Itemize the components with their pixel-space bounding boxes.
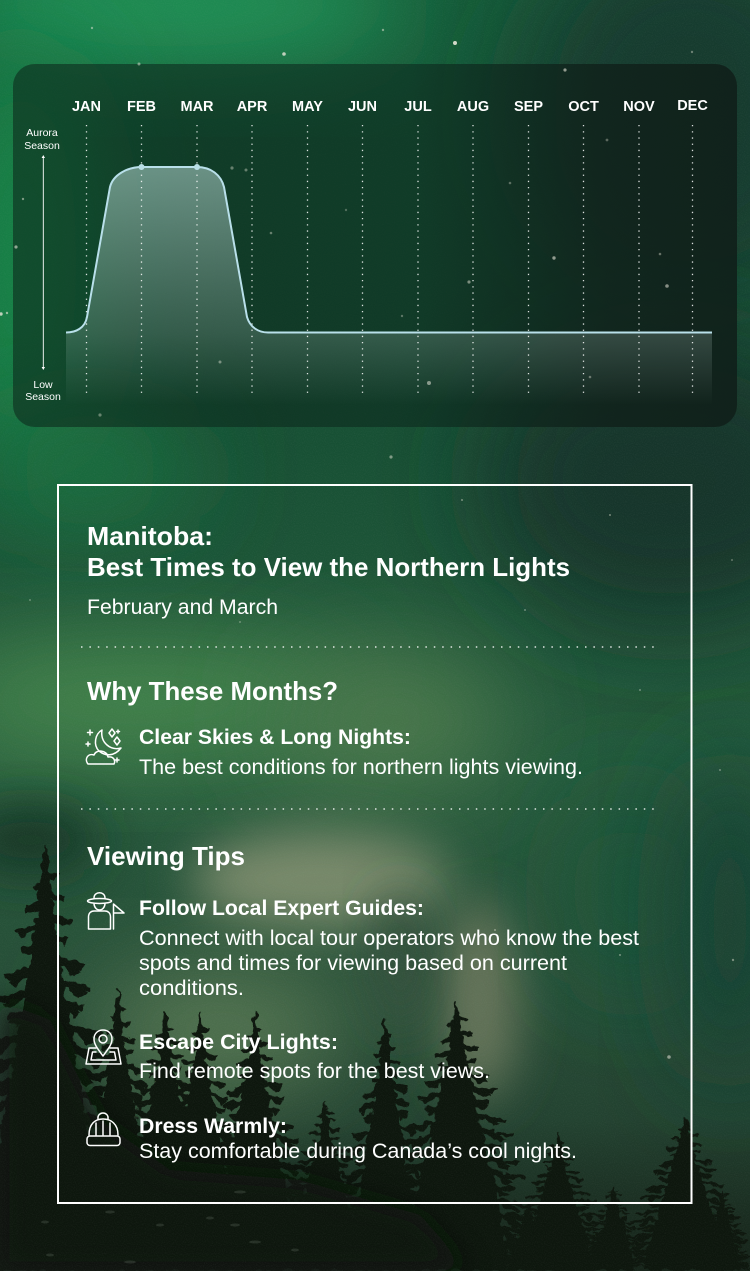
heading: viewing tips: Viewing Tips <box>87 841 245 871</box>
item: escape city lights: Escape City Lights: <box>139 1030 338 1054</box>
month labels: MAY <box>292 99 323 115</box>
subheading: best months: February and March <box>87 596 278 619</box>
peak marker: March <box>194 164 200 170</box>
month labels: JUN <box>348 99 377 115</box>
month gridlines <box>86 125 692 395</box>
area under season curve <box>66 167 712 405</box>
month labels: JAN <box>72 99 101 115</box>
icon: winter hat <box>87 1113 120 1146</box>
month labels: OCT <box>568 99 599 115</box>
item: dress warmly: Stay comfortable during Canada’s cool nights. <box>139 1140 577 1163</box>
item: clear skies: The best conditions for northern lights viewing. <box>139 756 583 779</box>
item: local guides: spots and times for viewing based on current <box>139 952 567 975</box>
item: escape city lights: Find remote spots for the best views. <box>139 1060 490 1083</box>
background: light patches on lower branches <box>41 1190 299 1264</box>
divider one <box>81 646 658 648</box>
icon: guide with flag <box>88 893 124 929</box>
info panel border <box>58 485 692 1203</box>
y axis labels and arrow: Low <box>33 379 53 391</box>
item: local guides: Connect with local tour operators who know the best <box>139 927 639 950</box>
background: dark forest mass <box>0 1000 470 1271</box>
item: local guides: conditions. <box>139 977 244 1000</box>
heading: Manitoba best times: Best Times to View the Northern Lights <box>87 552 570 582</box>
month labels: JUL <box>404 99 432 115</box>
item: dress warmly <box>139 1114 577 1163</box>
month labels: APR <box>237 99 268 115</box>
month labels: DEC <box>677 98 708 114</box>
y axis labels and arrow: Aurora <box>26 127 58 139</box>
month labels: AUG <box>457 99 489 115</box>
background: stars <box>0 27 734 1059</box>
item: escape city lights <box>139 1030 490 1083</box>
season curve <box>66 167 712 332</box>
divider two <box>81 808 658 810</box>
icon: map pin <box>86 1030 121 1064</box>
peak marker: February <box>138 164 144 170</box>
month labels: SEP <box>514 99 543 115</box>
heading: Manitoba best times: Manitoba: <box>87 521 213 551</box>
icon: moon, stars and cloud <box>86 729 121 764</box>
month labels: MAR <box>180 99 214 115</box>
item: clear skies: Clear Skies & Long Nights: <box>139 725 411 749</box>
month labels: NOV <box>623 99 655 115</box>
y axis labels and arrow: Season <box>24 140 60 152</box>
item: local guides <box>139 896 639 1000</box>
heading: why these months: Why These Months? <box>87 676 338 706</box>
month labels: FEB <box>127 99 156 115</box>
background: spruce tree silhouettes <box>0 845 749 1271</box>
item: local guides: Follow Local Expert Guides: <box>139 896 424 920</box>
item: clear skies <box>139 725 583 779</box>
heading: Manitoba best times <box>87 521 570 582</box>
chart panel background <box>13 64 737 427</box>
aurora season chart <box>24 98 712 405</box>
y axis labels and arrow <box>24 127 61 403</box>
y axis labels and arrow: Season <box>25 391 61 403</box>
item: dress warmly: Dress Warmly: <box>139 1114 287 1138</box>
month labels <box>72 98 708 115</box>
